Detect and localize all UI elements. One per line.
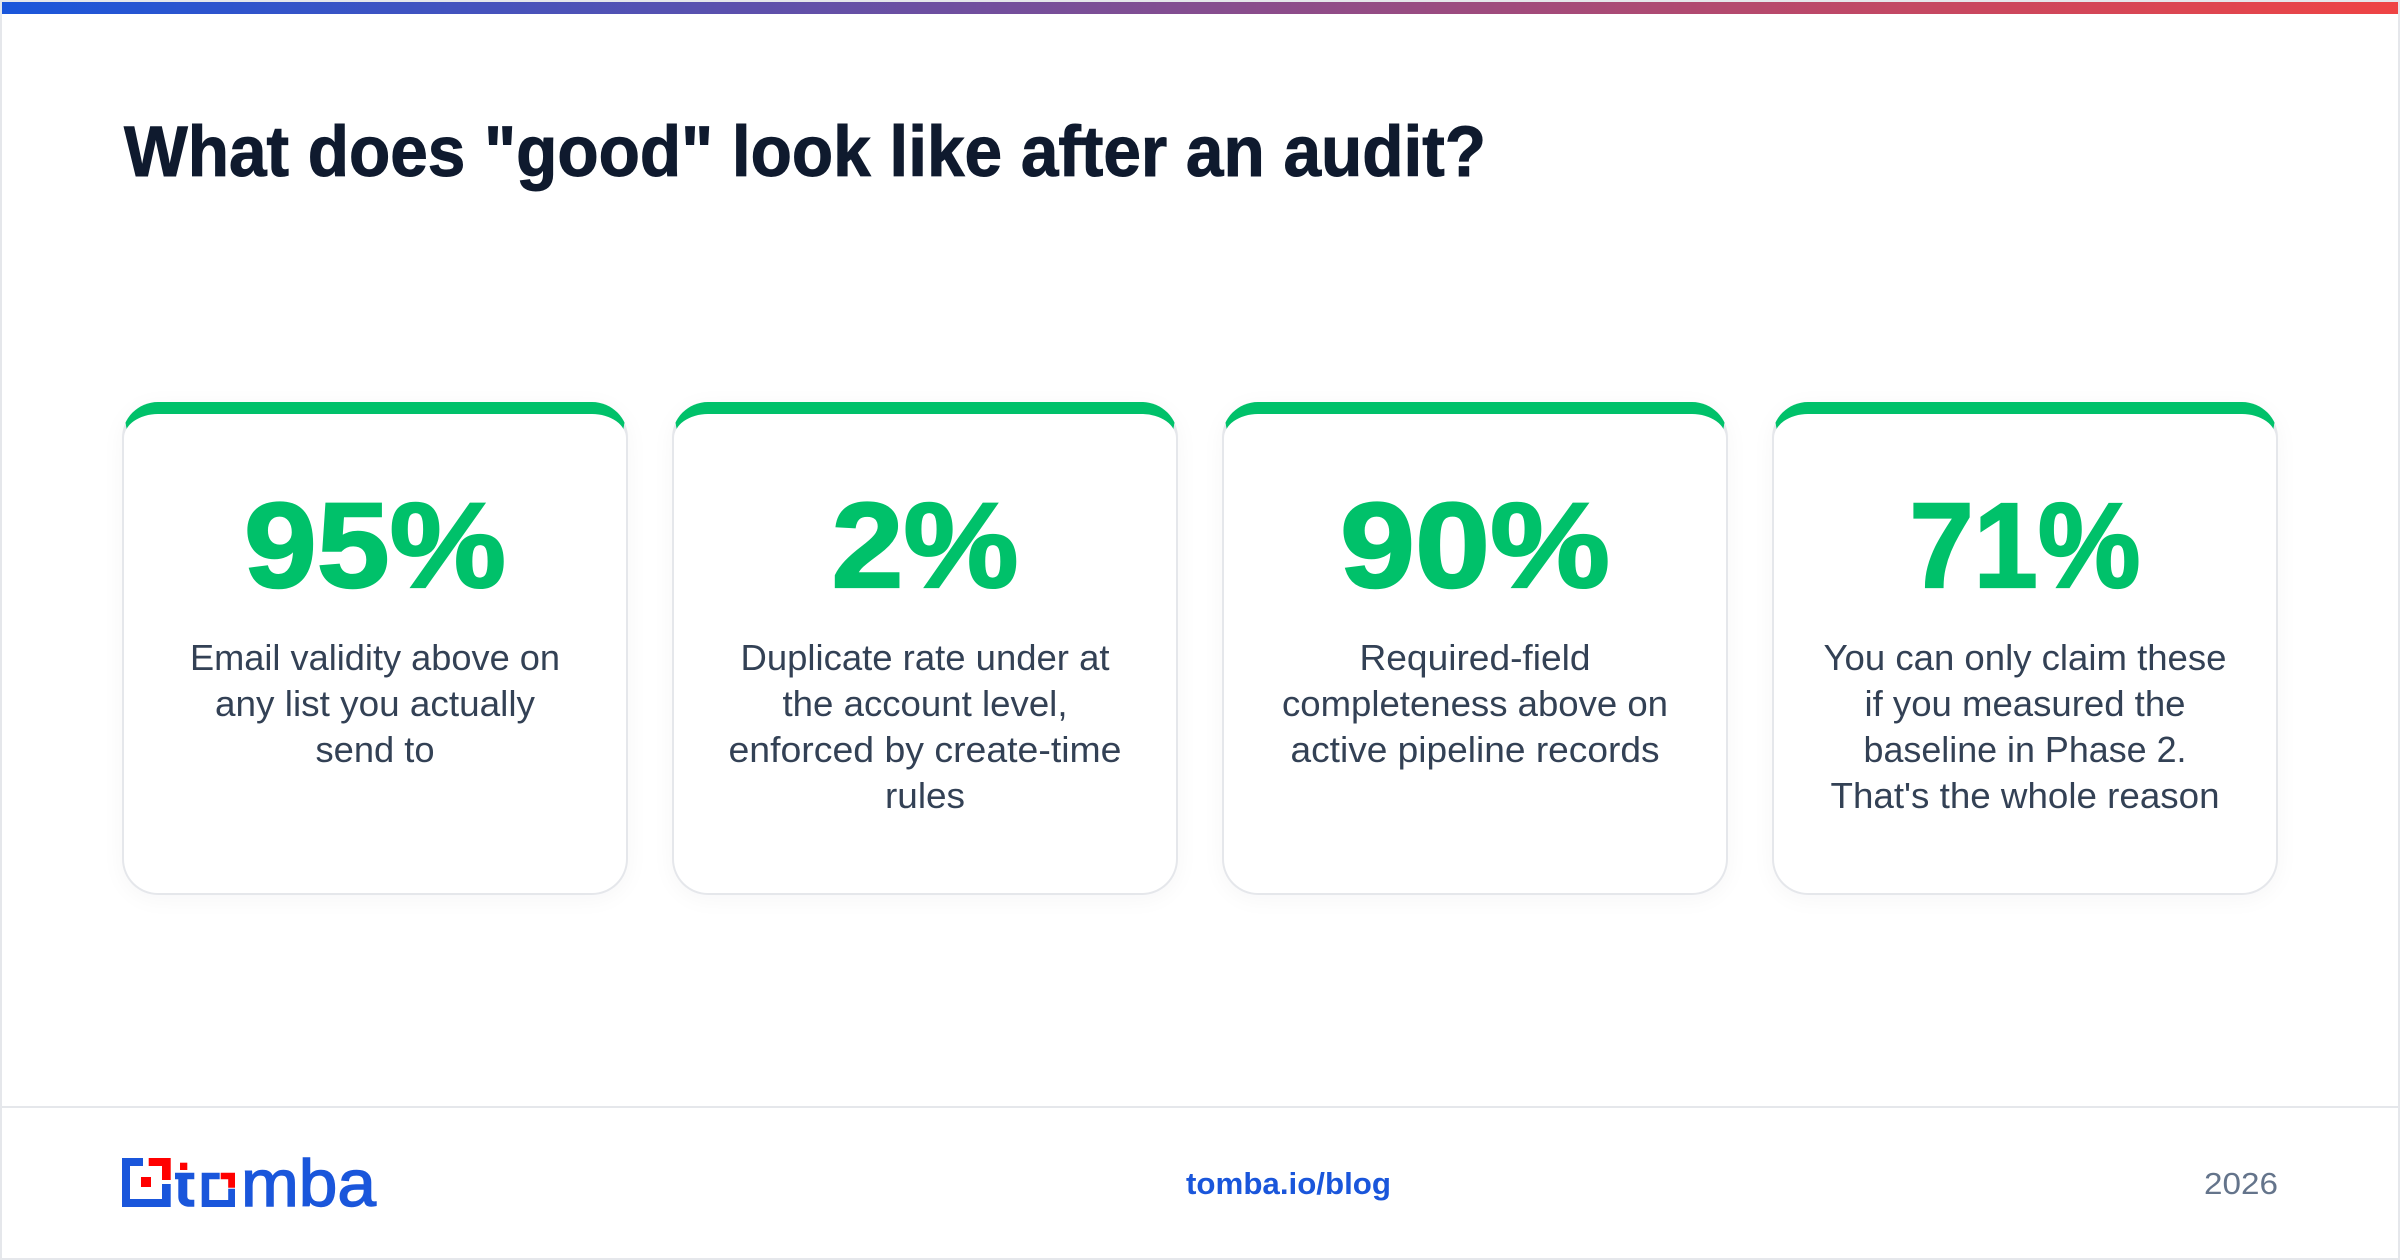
panel: card 71%	[1772, 402, 2278, 895]
description: baseline note	[1824, 637, 2226, 816]
stat: 95%: 95%	[244, 477, 506, 613]
description: required-field completeness	[1282, 637, 1668, 770]
description: duplicate rate: rules	[885, 775, 965, 816]
footer	[2, 1106, 2398, 1258]
description: email validity: send to	[316, 729, 434, 770]
description: duplicate rate: the account level,	[782, 683, 1068, 724]
description: email validity	[190, 637, 560, 770]
tomba logo	[122, 1146, 377, 1220]
description: duplicate rate: enforced by create-time	[728, 729, 1122, 770]
description: required-field completeness: Required-field	[1360, 637, 1590, 678]
description: baseline note: if you measured the	[1864, 683, 2186, 724]
footer year: 2026	[2204, 1166, 2278, 1201]
description: required-field completeness: completeness above on	[1282, 683, 1668, 724]
stat: 71%: 71%	[1910, 477, 2140, 613]
description: duplicate rate: Duplicate rate under at	[740, 637, 1110, 678]
stat: 2%: 2%	[832, 477, 1018, 613]
title: What does "good" look like after an audit?	[124, 113, 1486, 192]
description: email validity: any list you actually	[215, 683, 535, 724]
panel: card 2%	[672, 402, 1178, 895]
description: baseline note: You can only claim these	[1824, 637, 2226, 678]
panel: card 95%	[122, 402, 628, 895]
stat: 90%: 90%	[1340, 477, 1610, 613]
logo wordmark: mba	[241, 1146, 376, 1220]
icon: stylised t and o	[175, 1163, 235, 1207]
footer link: tomba.io/blog	[1186, 1166, 1391, 1201]
description: baseline note: That's the whole reason	[1830, 775, 2220, 816]
description: duplicate rate	[728, 637, 1122, 816]
description: required-field completeness: active pipeline records	[1290, 729, 1659, 770]
top gradient bar	[2, 2, 2398, 14]
panel: card 90%	[1222, 402, 1728, 895]
description: email validity: Email validity above on	[190, 637, 560, 678]
description: baseline note: baseline in Phase 2.	[1864, 729, 2186, 770]
icon: logo mark	[122, 1158, 171, 1207]
